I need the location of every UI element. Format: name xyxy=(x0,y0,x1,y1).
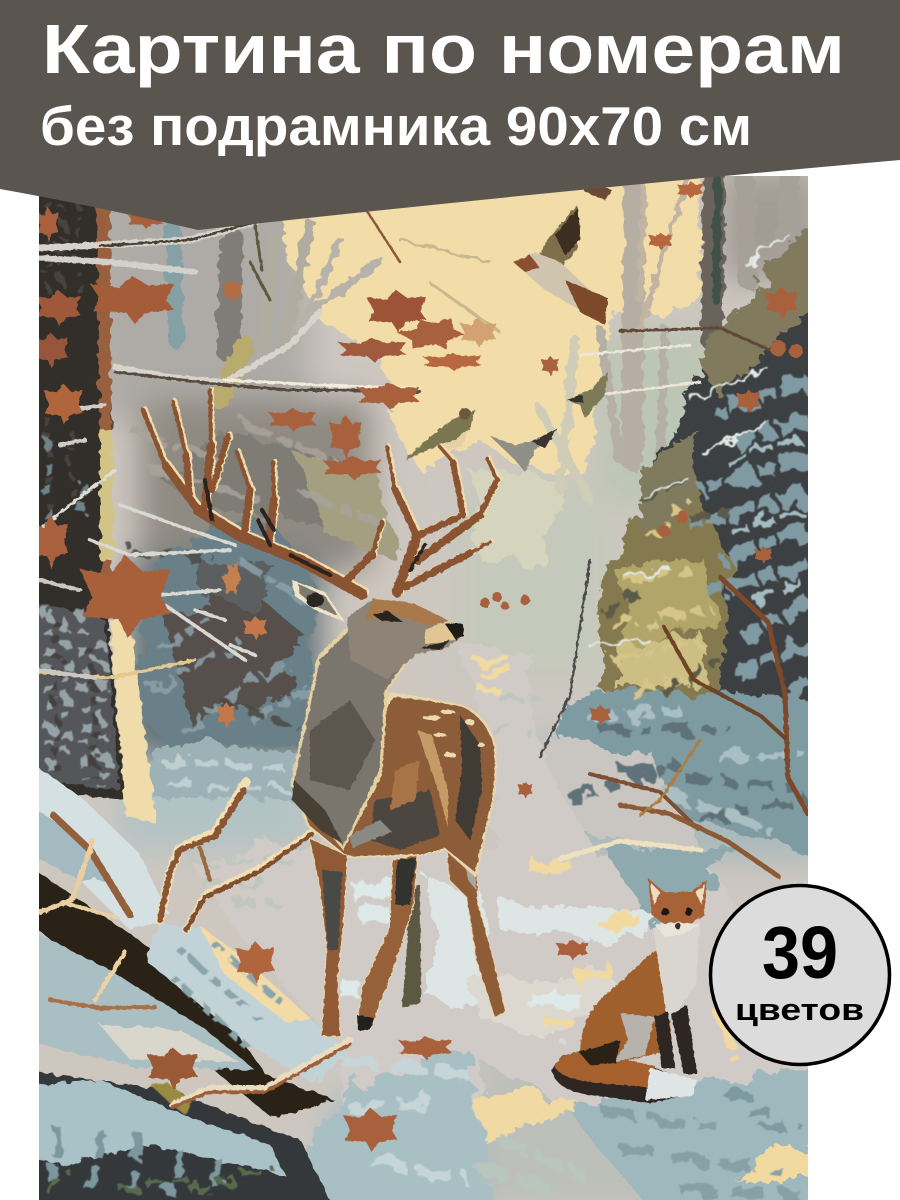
snow and light patches xyxy=(190,660,800,1195)
badge: 39 colours xyxy=(710,886,890,1064)
front near leg xyxy=(310,839,347,1036)
body xyxy=(293,692,497,878)
bird: large flying xyxy=(513,205,608,325)
background trees and bare pale branches xyxy=(172,170,790,500)
fox body xyxy=(580,950,672,1062)
bare branches xyxy=(39,208,808,1107)
gray neck and chest xyxy=(290,625,410,850)
ear xyxy=(292,580,345,622)
bird: centre flying xyxy=(490,428,557,472)
fallen snowy log at bottom left xyxy=(20,755,345,1200)
badge label: цветов xyxy=(735,992,864,1027)
bird: right flying xyxy=(567,372,608,418)
sky xyxy=(270,160,710,560)
snowy path and ground xyxy=(190,650,830,1200)
fox head xyxy=(648,878,707,937)
bird: small flying top xyxy=(584,188,612,200)
upper left branches xyxy=(39,208,420,678)
fox chest xyxy=(653,922,700,1022)
fox legs xyxy=(654,1005,697,1074)
header banner xyxy=(0,0,900,230)
badge number: 39 xyxy=(762,911,838,994)
fox xyxy=(552,878,707,1103)
foliage strokes xyxy=(130,420,390,790)
forest underpainting xyxy=(39,150,830,1200)
hind far leg xyxy=(402,885,421,1007)
flying and perched birds xyxy=(405,180,612,472)
painting: winter forest with deer and fox xyxy=(20,150,830,1200)
fir tree on the right xyxy=(540,230,830,860)
hind near leg xyxy=(447,843,505,1017)
fox haunch and belly xyxy=(579,1013,655,1065)
left tree trunk xyxy=(30,180,157,825)
fir boughs xyxy=(570,235,808,830)
antlers xyxy=(143,388,499,594)
foreground twigs xyxy=(40,782,350,1107)
head xyxy=(347,599,464,679)
bush: dark blue-grey foliage on the left xyxy=(135,430,395,800)
bird: perched on antler xyxy=(405,408,475,460)
title: Картина по номерам xyxy=(42,10,845,88)
leaves and berries xyxy=(32,181,803,1152)
subtitle: без подрамника 90х70 см xyxy=(40,95,752,157)
right side branches xyxy=(540,328,808,876)
front far leg xyxy=(357,856,417,1030)
fox tail xyxy=(552,1052,697,1103)
deer xyxy=(143,388,505,1036)
